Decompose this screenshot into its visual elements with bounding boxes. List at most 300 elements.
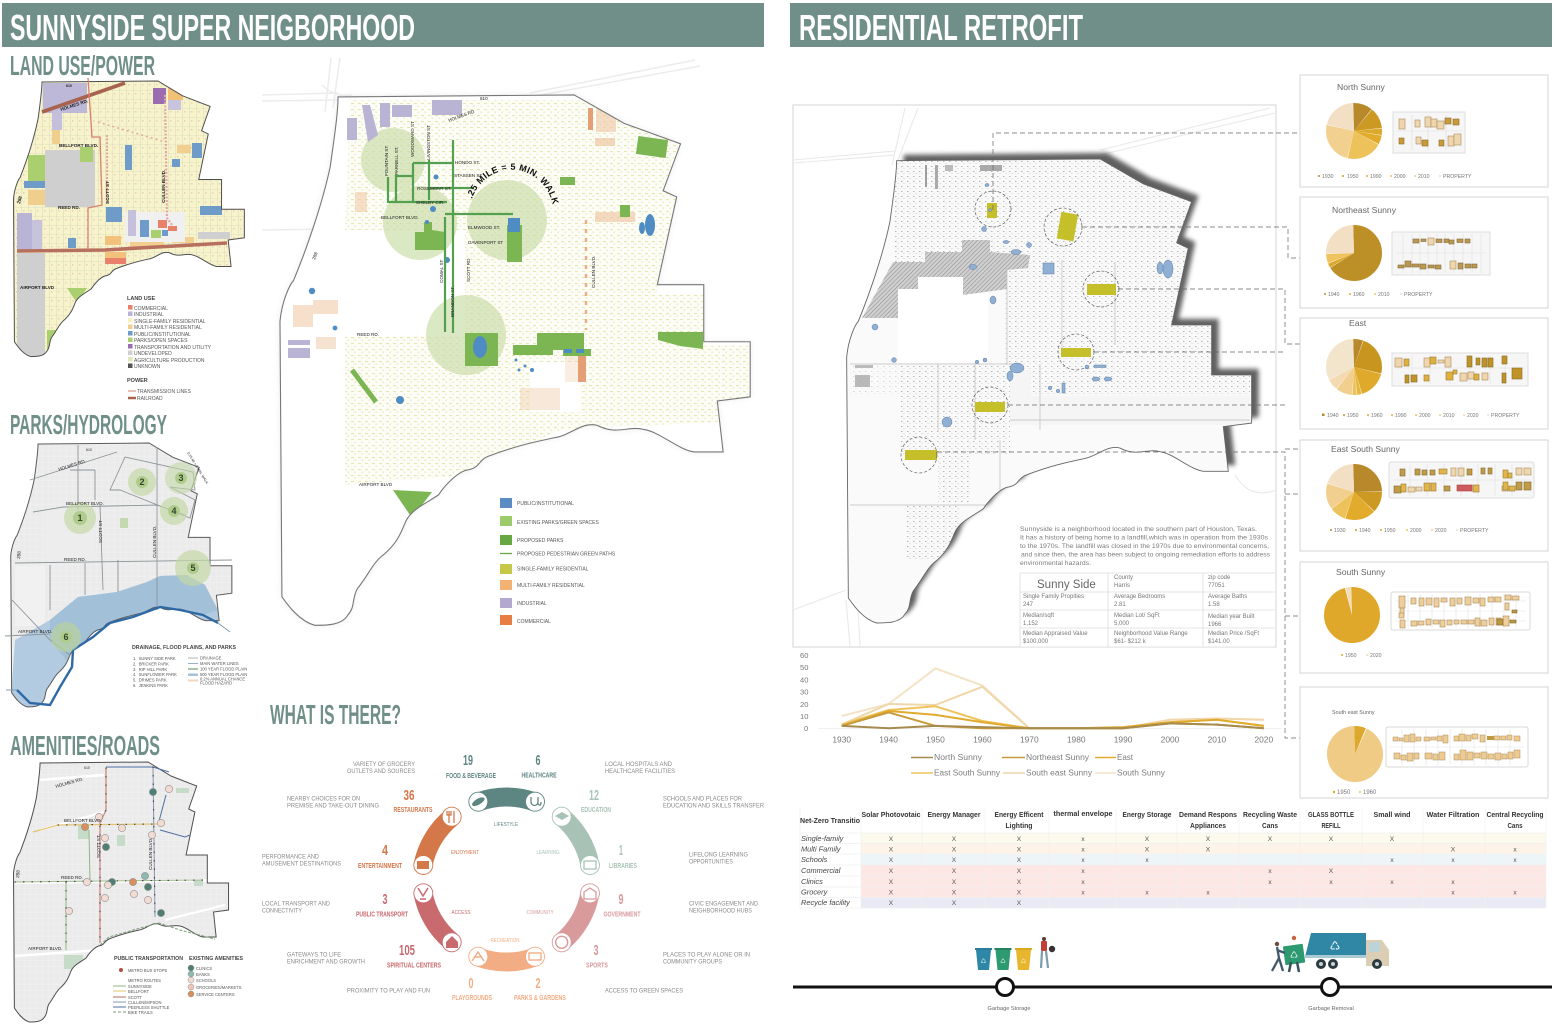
park map street labels: AIRPORT BLVD. (18, 629, 52, 634)
main map street labels (311, 96, 596, 487)
table marks: x (1268, 868, 1272, 875)
inner group labels: ACCESS (452, 910, 471, 916)
legend: East South Sunny: PROPERTY (1460, 528, 1489, 534)
neighborhood statistics table: 1,152 (1023, 621, 1039, 627)
descriptions: AMUSEMENT DESTINATIONS (262, 860, 341, 868)
main map street labels: 610 (480, 96, 488, 101)
chart axes: 1940 (879, 734, 898, 744)
amenities street labels: HOLMES RD. (55, 776, 84, 789)
pie: Northeast Sunny (1340, 239, 1368, 267)
legend: land use: UNDEVELOPED (134, 351, 172, 357)
chart legend: South Sunny (1117, 768, 1165, 778)
inner group labels: ENJOYMENT (451, 850, 479, 856)
legend: land use: AGRICULTURE PRODUCTION (134, 358, 205, 364)
legend: land use: UNKNOWN (134, 364, 161, 370)
neighborhood statistics table: Harris (1114, 583, 1130, 589)
industrial blocks (288, 100, 462, 358)
pie: East (1340, 353, 1368, 381)
timeline: Garbage Storage (988, 1006, 1030, 1012)
numbers and category labels: ENTERTAINMENT (358, 861, 402, 870)
chart series lines (842, 668, 1264, 728)
legend: East South Sunny: 2000 (1410, 528, 1422, 534)
descriptions: ACCESS TO GREEN SPACES (605, 988, 683, 994)
descriptions: LOCAL HOSPITALS AND (605, 761, 672, 768)
table marks: X (952, 900, 957, 907)
table marks: X (1390, 836, 1395, 843)
table marks: X (1017, 900, 1022, 907)
numbers and category labels: RESTAURANTS (394, 805, 433, 814)
table marks: X (889, 846, 894, 854)
land use street labels: SCOTT ST (105, 181, 110, 204)
legend: land use: PUBLIC/INSTITUTIONAL (134, 332, 191, 338)
park walk circles (51, 462, 211, 652)
public institutional blobs (872, 184, 1173, 427)
neighborhood statistics table: County (1114, 575, 1133, 581)
park walk circles: 3 (178, 473, 184, 483)
table marks: X (1145, 836, 1150, 843)
undeveloped blocks (855, 375, 870, 387)
legend: North Sunny: 1950 (1347, 174, 1359, 180)
legend: drainage, flood plains, parks: 2. BRICKER PARK (133, 662, 169, 666)
proposed pedestrian green paths (388, 140, 513, 333)
table marks: x (1081, 857, 1085, 864)
table marks: X (1017, 836, 1022, 843)
table row labels: Clinics (801, 877, 823, 886)
neighborhood statistics table: Neighborhood Value Range (1114, 631, 1188, 637)
table row labels: Single-family (801, 834, 845, 843)
map outline (847, 159, 1252, 623)
main map street labels: STASSEN ST (454, 173, 482, 178)
pie: East South Sunny (1340, 478, 1368, 506)
legend: East: 2000 (1419, 413, 1431, 419)
legend: South Sunny: 2020 (1370, 653, 1382, 659)
icon: recycling truck and workers (1272, 933, 1389, 972)
numbers and category labels: FOOD & BEVERAGE (446, 771, 496, 780)
timeline: Garbage Removal (1308, 1006, 1354, 1012)
legend: East: 2010 (1443, 413, 1455, 419)
table header: Lighting (1006, 823, 1032, 830)
chart axes: 1930 (832, 734, 851, 744)
table marks: X (1017, 846, 1022, 854)
icon: waste bins and person: ♺ (1021, 958, 1026, 965)
numbers and category labels: PLAYGROUNDS (452, 993, 492, 1002)
descriptions: OPPORTUNITIES (689, 858, 733, 866)
inner group labels: RECREATION (490, 938, 520, 944)
legend: public transportation and amenities: SUNNYSIDE (128, 984, 152, 989)
parcel diagram: Northeast Sunny (1392, 232, 1490, 275)
numbers and category labels: GOVERNMENT (604, 910, 641, 918)
chart axes: 2020 (1254, 734, 1273, 744)
main map street labels: LIVINGSTON ST (426, 125, 431, 160)
numbers and category labels: 3 (382, 892, 388, 908)
legend: land use: MULTI-FAMILY RESIDENTIAL (134, 325, 202, 331)
main map street labels: 288 (311, 251, 319, 260)
main map street labels: HONDO ST. (455, 160, 480, 165)
panel: North Sunny (1300, 75, 1548, 187)
chart axes: 50 (800, 663, 808, 672)
park map street labels (16, 448, 209, 634)
legend: drainage, flood plains, parks: 500 YEAR FLOOD PLAIN (200, 672, 247, 677)
description text: It has a history of being home to a landfill,which was in operation from the 1930s (1020, 534, 1268, 542)
legend: North Sunny: 1930 (1322, 174, 1334, 180)
legend: drainage, flood plains, parks: 1. SUNNY SIDE PARK (133, 656, 176, 661)
descriptions: LOCAL TRANSPORT AND (262, 900, 330, 908)
panel: South east Sunny (1300, 687, 1548, 798)
table marks: X (1145, 846, 1150, 854)
chart axes: 2000 (1161, 734, 1180, 744)
amenities street labels: BELLFORT BLVD. (64, 818, 102, 823)
table marks: X (1329, 836, 1334, 843)
table: net-zero transition matrix (800, 808, 1546, 908)
chart legend: North Sunny (934, 753, 982, 762)
main map street labels: DAVENPORT ST (468, 240, 503, 245)
main map street labels: SHELBY CIR. (416, 200, 445, 205)
land use street labels: HOLMES RD. (60, 98, 89, 112)
heading: what is there: WHAT IS THERE? (270, 699, 401, 730)
amenities street labels: REED RD. (61, 875, 83, 880)
ring: access (414, 884, 461, 952)
descriptions: CONNECTIVITY (262, 908, 303, 914)
land use street labels: REED RD. (58, 205, 80, 210)
panel: Northeast Sunny: Northeast Sunny (1332, 205, 1397, 215)
legend: land use: POWER (127, 378, 148, 384)
descriptions: PLACES TO PLAY ALONE OR IN (663, 952, 750, 958)
table marks: X (1268, 836, 1273, 843)
ring: learning (552, 807, 600, 874)
numbers and category labels: EDUCATION (581, 805, 611, 814)
pie: North Sunny (1340, 117, 1368, 145)
chart axes: 10 (800, 712, 808, 721)
legend: public transportation and amenities: BIKE TRAILS (128, 1010, 153, 1015)
timeline (793, 978, 1552, 1012)
legend: public transportation and amenities: BELLFORT (128, 989, 150, 994)
descriptions: PROXIMITY TO PLAY AND FUN (347, 988, 430, 994)
legend: public transportation and amenities: SCOTT (128, 995, 142, 1000)
legend: drainage, flood plains, parks: 6. JENKINS PARK (133, 683, 168, 688)
amenities street labels: SCOTT ST (96, 835, 101, 858)
ring: enjoyment (414, 807, 461, 874)
neighborhood statistics table: 1.58 (1208, 602, 1220, 608)
table marks: X (1329, 868, 1334, 875)
legend: main map: PROPOSED PARKS (517, 538, 564, 544)
legend: Northeast Sunny: 2010 (1378, 292, 1390, 298)
panel: North Sunny: North Sunny (1337, 82, 1385, 92)
numbers and category labels: SPIRITUAL CENTERS (387, 960, 441, 970)
amenities street labels: 288 (15, 870, 21, 878)
left header banner: SUNNYSIDE SUPER NEIGBORHOOD (10, 7, 415, 48)
table marks: x (1451, 890, 1455, 896)
main map street labels: CULLEN BLVD. (591, 256, 596, 288)
neighborhood statistics table: Median Price /SqFt (1208, 631, 1259, 637)
neighborhood statistics table: 1966 (1208, 622, 1222, 628)
chart axes: 20 (800, 700, 808, 709)
legend: public transportation and amenities: METRO ROUTES (128, 978, 161, 983)
park walk circles: 1 (77, 513, 83, 523)
legend: drainage, flood plains, parks (132, 645, 247, 688)
river (17, 607, 218, 705)
numbers and category labels: 9 (618, 892, 624, 908)
legend: public transportation and amenities: CULLEN/IMPSON (128, 1000, 161, 1005)
legend: land use: TRANSPORTATION AND UTILITY (134, 345, 212, 351)
chart axes: 1980 (1067, 734, 1086, 744)
neighborhood statistics table: zip code (1208, 575, 1231, 581)
table header: Net-Zero Transitio (800, 818, 860, 825)
park walk circles: 2 (139, 477, 145, 487)
amenities street labels: 610 (84, 766, 90, 770)
park map street labels: 288 (16, 551, 22, 559)
icon: recycling truck and workers: ♺ (1330, 939, 1340, 953)
amenities street labels: AIRPORT BLVD. (28, 946, 62, 951)
descriptions: PREMISE AND TAKE-OUT DINING (287, 802, 379, 810)
neighborhood statistics table: Median/sqft (1023, 613, 1054, 619)
legend: public transportation and amenities: EXISTING AMENITIES (189, 956, 243, 962)
table marks: x (1081, 868, 1085, 875)
panel: what is there ring diagram (262, 753, 764, 1002)
table marks: x (1513, 846, 1517, 854)
neighborhood statistics table: 2.81 (1114, 602, 1126, 608)
icon: recycling truck and workers: ♺ (1290, 950, 1298, 960)
chart axes: 1950 (926, 734, 945, 744)
row backgrounds (800, 808, 1546, 908)
main map street labels: BRANDON ST. (450, 286, 455, 317)
numbers and category labels: 1 (619, 843, 623, 859)
neighborhood statistics table: $61- $212 k (1114, 639, 1147, 645)
highways context (793, 108, 1276, 646)
numbers and category labels: 6 (536, 753, 540, 769)
legend: East South Sunny (1330, 528, 1489, 534)
land use street labels (16, 84, 166, 290)
numbers and category labels (356, 753, 641, 1002)
descriptions: ENRICHMENT AND GROWTH (287, 958, 365, 966)
multi-family clusters (293, 110, 635, 410)
chart axes: 1990 (1114, 734, 1133, 744)
table marks: X (1017, 857, 1022, 864)
chart axes: 60 (800, 651, 808, 660)
legend: South east Sunny: 1950 (1337, 790, 1351, 796)
numbers and category labels: HEALTHCARE (522, 770, 557, 780)
table marks: X (1017, 890, 1022, 896)
descriptions: PERFORMANCE AND (262, 854, 319, 860)
numbers and category labels: 12 (589, 788, 599, 804)
legend: East South Sunny: 1940 (1359, 528, 1371, 534)
park map street labels: 610 (86, 448, 92, 452)
panel: South Sunny: South Sunny (1336, 567, 1386, 577)
map shadow (854, 153, 1259, 617)
legend: drainage, flood plains, parks: DRAINAGE, FLOOD PLAINS, AND PARKS (132, 645, 236, 651)
chart axes: 30 (800, 688, 808, 696)
descriptions: VARIETY OF GROCERY (353, 761, 416, 768)
legend: North Sunny: PROPERTY (1443, 174, 1472, 180)
legend: North Sunny: 1990 (1370, 174, 1382, 180)
legend: South Sunny (1341, 653, 1382, 659)
park walk circles: 5 (190, 563, 196, 573)
table row labels: Multi Family (801, 844, 842, 854)
heading: parks/hydrology: PARKS/HYDROLOGY (10, 409, 167, 440)
landfill hatch area (862, 240, 1030, 318)
legend: main map: MULTI-FAMILY RESIDENTIAL (517, 583, 585, 589)
legend: land use: TRANSMISSION LINES (137, 389, 192, 395)
icon: waste bins and person (975, 937, 1055, 970)
neighborhood statistics table: Median year Built (1208, 614, 1255, 620)
legend: main map: PROPOSED PEDESTRIAN GREEN PATHS (517, 552, 616, 558)
target single-family blocks (901, 191, 1119, 473)
neighborhood statistics table: Median Lot/ SqFt (1114, 613, 1160, 619)
chart axes: 1970 (1020, 734, 1039, 744)
table marks: X (1206, 836, 1211, 843)
ring: community (552, 884, 600, 952)
descriptions (262, 761, 764, 994)
table marks: x (1451, 857, 1455, 864)
legend: Northeast Sunny: PROPERTY (1404, 292, 1433, 298)
numbers and category labels: 3 (594, 943, 598, 959)
descriptions: CIVIC ENGAGEMENT AND (689, 900, 758, 908)
table header: Energy Manager (928, 812, 981, 819)
legend: drainage, flood plains, parks: DRAINAGE (200, 656, 222, 660)
legend: Northeast Sunny: 1960 (1353, 292, 1365, 298)
table marks: x (1268, 879, 1272, 886)
table marks: X (952, 836, 957, 843)
legend: South east Sunny: 1960 (1363, 790, 1377, 796)
numbers and category labels: LIBRARIES (609, 861, 637, 870)
main map street labels: PARNELL ST. (394, 147, 399, 175)
legend: East South Sunny: 1930 (1334, 528, 1346, 534)
panel: South Sunny (1300, 562, 1548, 673)
highways context lines (262, 58, 700, 230)
legend: drainage, flood plains, parks: 3. RIP HILL PARK (133, 667, 167, 672)
numbers and category labels: SPORTS (586, 960, 608, 970)
legend: land use: LAND USE (127, 296, 155, 302)
table marks: X (952, 846, 957, 854)
legend: drainage, flood plains, parks: 5. DRIMES PARK (133, 678, 167, 682)
legend: East: 1990 (1395, 413, 1407, 419)
table marks: X (952, 890, 957, 896)
park map street labels: BELLFORT BLVD. (66, 501, 104, 506)
legend: land use: INDUSTRIAL (134, 312, 164, 318)
legend: North Sunny (1318, 174, 1472, 180)
land use street labels: 610 (66, 84, 72, 88)
main map street labels: FOUNTAIN ST (384, 146, 389, 176)
numbers and category labels: 0 (468, 976, 474, 992)
chart legend: East South Sunny (934, 768, 1000, 778)
chart axes (800, 651, 1282, 744)
table marks: x (1513, 890, 1517, 896)
pie: South Sunny (1338, 601, 1366, 629)
legend: East: 1940 (1327, 413, 1339, 419)
transmission lines (88, 78, 172, 250)
amenities street labels (15, 766, 153, 951)
panel: retrofit map frame (790, 105, 1276, 647)
panel: South east Sunny: South east Sunny (1332, 710, 1375, 716)
land use street labels: AIRPORT BLVD (20, 285, 55, 290)
neighborhood statistics table: Average Bedrooms (1114, 594, 1165, 600)
right header banner (790, 3, 1552, 48)
numbers and category labels: 19 (463, 753, 473, 769)
legend: land use: SINGLE-FAMILY RESIDENTIAL (134, 319, 206, 325)
table header: GLASS BOTTLE (1308, 812, 1354, 819)
legend: public transportation and amenities: GROCERIES/MARKETS (196, 985, 242, 990)
descriptions: NEARBY CHOICES FOR ON (287, 796, 360, 802)
table row labels (801, 834, 851, 907)
panel: Northeast Sunny (1300, 197, 1548, 308)
legend: main map (500, 498, 616, 625)
main map street labels: BELLFORT BLVD. (381, 215, 419, 220)
descriptions: EDUCATION AND SKILLS TRANSFER (663, 802, 764, 810)
legend: East: 1960 (1371, 413, 1383, 419)
panel: East (1300, 318, 1548, 429)
main map street labels: SCOTT RD (466, 258, 471, 282)
legend: land use: PARKS/OPEN SPACES (134, 338, 188, 344)
descriptions: SCHOOLS AND PLACES FOR (663, 796, 742, 802)
land use street labels: 288 (16, 195, 23, 204)
table header: Energy Storage (1122, 812, 1172, 819)
numbers and category labels: PARKS & GARDENS (514, 993, 566, 1002)
inner group labels: LIFESTYLE (494, 822, 518, 828)
table marks: X (889, 890, 894, 896)
chart legend (911, 753, 1165, 778)
legend: main map: INDUSTRIAL (517, 601, 547, 607)
inner group labels: LEARNING (536, 850, 560, 856)
table marks (889, 836, 1517, 907)
icon: waste bins and person: ♺ (981, 958, 986, 965)
table marks: x (1145, 857, 1149, 864)
table marks: x (1390, 857, 1394, 864)
table header: Cans (1262, 823, 1278, 830)
table header: Recycling Waste (1243, 812, 1297, 819)
neighborhood statistics table: 5,000 (1114, 621, 1130, 627)
numbers and category labels: PUBLIC TRANSPORT (356, 910, 408, 918)
legend: North Sunny: 2000 (1394, 174, 1406, 180)
parcel diagram: North Sunny (1393, 112, 1465, 153)
neighborhood statistics table: 247 (1023, 602, 1034, 608)
legend: public transportation and amenities: SCHOOLS (196, 978, 216, 983)
main map street labels: ELMWOOD ST. (468, 225, 500, 230)
table header: Solar Photovotaic (862, 812, 921, 819)
table row labels: Grocery (801, 888, 829, 896)
table marks: X (889, 836, 894, 843)
park map street labels: CULLEN BLVD. (152, 526, 157, 558)
park walk circles: 4 (171, 506, 177, 516)
neighborhood statistics table (1020, 573, 1275, 647)
parcel diagram: East (1392, 353, 1528, 386)
legend: land use (127, 296, 212, 402)
legend: public transportation and amenities: SERVICE CENTERS (196, 992, 235, 997)
panel: amenities and roads map (13, 762, 243, 1022)
table marks: X (1206, 846, 1211, 854)
legend: drainage, flood plains, parks: 0.2% ANNUAL CHANCE (200, 676, 245, 682)
legend: land use: COMMERCIAL (134, 306, 168, 312)
flood plain area (10, 575, 225, 712)
table marks: x (1081, 836, 1085, 843)
street lines (850, 260, 1250, 505)
main map street labels: AIRPORT BLVD (359, 482, 393, 487)
table marks: X (889, 900, 894, 907)
ring: lifestyle (469, 792, 544, 811)
table header: Central Recycling (1486, 812, 1544, 819)
legend: East: 1950 (1347, 413, 1359, 419)
table header: Energy Efficent (994, 812, 1044, 819)
table marks: X (889, 879, 894, 886)
main roads and water lines (5, 445, 232, 655)
panel: East South Sunny (1300, 440, 1548, 551)
table marks: x (1081, 890, 1085, 896)
descriptions: COMMUNITY GROUPS (663, 958, 722, 966)
legend: East (1322, 413, 1520, 419)
description text: and since then, the area has been subject to ongoing remediation efforts to address (1021, 552, 1270, 558)
chart axes: 2010 (1208, 734, 1227, 744)
table marks: x (1206, 890, 1210, 896)
descriptions: OUTLETS AND SOURCES (347, 768, 415, 775)
neighborhood statistics table: Average Baths (1208, 594, 1247, 600)
